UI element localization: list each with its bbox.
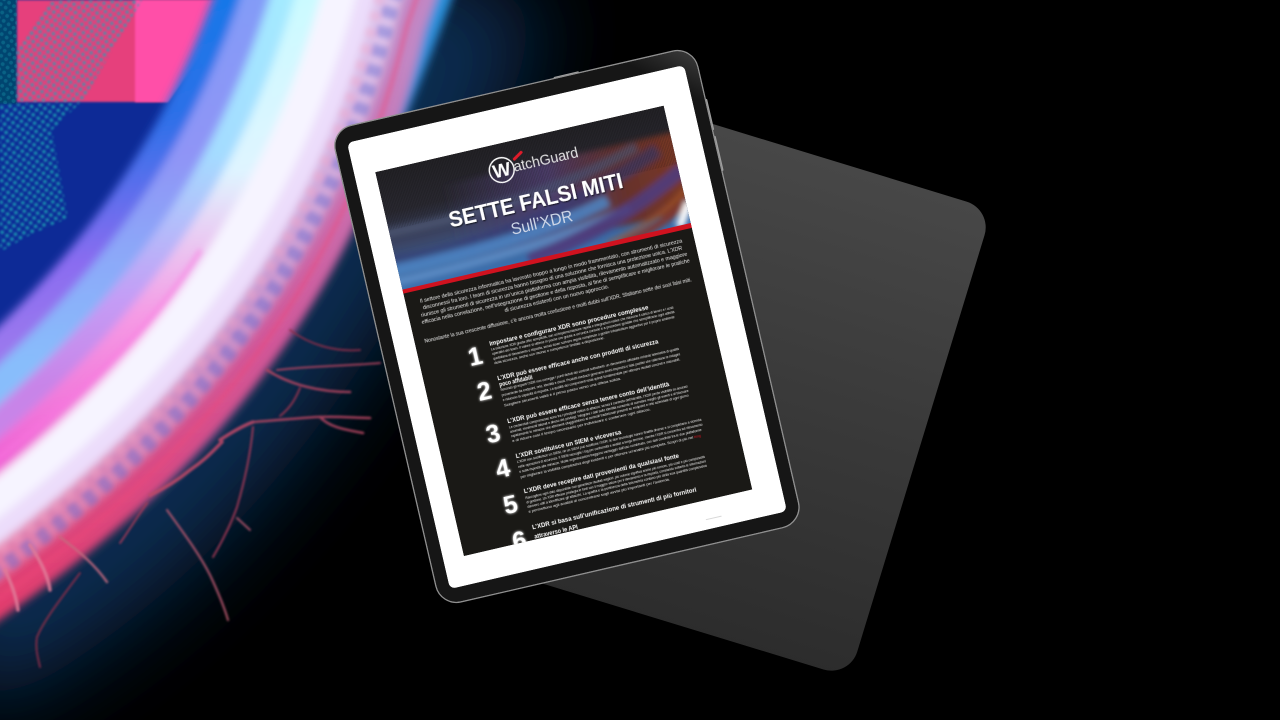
myth 4: e sulla risposta alle minacce. Molte organizzazioni traggono vantaggio dall’uso combinato, con dati condivisi tra le due piattaforme: [519, 428, 702, 474]
myth 4: L’XDR sostituisce un SIEM e viceversa: [515, 429, 622, 460]
tablet screen: [347, 65, 787, 589]
banner artwork: [370, 105, 696, 295]
banner streaks: [377, 132, 696, 295]
number 6: 6: [510, 526, 529, 556]
myth 2: poco affidabili: [499, 374, 533, 389]
myth 5: Raccogliere ogni dato disponibile non garantisce risultati migliori: più volume significa anche più rumore, più costi e più complessità: [525, 455, 706, 500]
myth 3: Le credenziali compromesse sono tra i principali vettori di attacco: senza il contesto dell’identità, l’XDR perde visibilità su accessi: [509, 384, 688, 430]
myth 3: anomali, movimenti laterali e abuso dei privilegi. Integrare i dati sulle identità consente di correlare meglio gli eventi e di bloccare: [510, 389, 689, 434]
number 5: 5: [501, 490, 521, 520]
logo letter: W: [491, 159, 513, 182]
myth 3: e di ridurre così il tempo necessario per individuare e contenere ogni attacco.: [512, 407, 651, 443]
myth 3: [507, 377, 691, 443]
page background: [375, 106, 752, 556]
navy panel: [0, 0, 260, 360]
dark navy glow: [0, 0, 470, 640]
document page: [370, 105, 759, 569]
red band: [402, 223, 692, 294]
title: SETTE FALSI MITI: [446, 168, 625, 232]
myth 6: L’XDR si basa sull’unificazione di strumenti di più fornitori: [531, 486, 697, 531]
red link: blog: [694, 434, 701, 439]
number 2: 2: [475, 377, 494, 407]
textured streak overlays: [0, 0, 462, 696]
teal mesh on corner: [0, 0, 17, 104]
tablet buttons: [555, 46, 722, 202]
teal mesh on pink: [17, 0, 142, 102]
myth 4: L’XDR non sostituisce un SIEM, né un SIEM può sostituire l’XDR: le due tecnologie hanno finalità diverse e si completano a vicenda: [517, 417, 703, 464]
intro text: [415, 238, 695, 345]
dark teal corner: [0, 0, 17, 104]
myth 6: attraverso le API: [534, 524, 579, 540]
intro text: disconnessi fra loro. I team di sicurezza hanno bisogno di una soluzione che fornisca una protezione unica. L’XDR: [422, 245, 683, 311]
hot pink segment: [135, 0, 240, 102]
myth 3: rapidamente le minacce che altrimenti sfuggirebbero ai controlli tradizionali presenti su endpoint e rete aziendale di ogni giorno: [511, 394, 689, 439]
myth 1: La soluzione XDR giusta offre semplicità, con un’implementazione rapida e integrazioni native che riducono il carico di lavoro e i costi: [491, 305, 674, 351]
screen glare: [706, 516, 721, 520]
bezel gloss: top right corner highlight: [331, 47, 802, 606]
myth 2: Secondo gli esperti l’XDR non corregge i punti deboli dei controlli sottostanti: un rilevamento affidabile richiede telemetria di qualità: [500, 347, 680, 392]
logo circle: [488, 156, 515, 184]
intro text: Il settore della sicurezza informatica ha lavorato troppo a lungo in modo frammentato, con strumenti di sicurezza: [419, 238, 683, 305]
myth 1: operativi del team. Il valore si ottiene in poche ore grazie a un’unica console e a procedure guidate che semplificano ogni attività: [492, 310, 676, 356]
banner base: [375, 106, 691, 290]
myth 2: e riducono la capacità di risposta. La qualità dei componenti resta quindi fondamentale per ottenere risultati concreti e misurabili.: [502, 358, 681, 402]
illustration: tablet mockup over light-streak background: [0, 0, 986, 720]
intro text: Nonostante la sua crescente diffusione, c’è ancora molta confusione e molti dubbi sull’XDR. Sfatiamo sette dei suoi falsi miti.: [424, 277, 692, 345]
number 4: 4: [493, 454, 513, 484]
myth 1: quotidiana di rilevamento e risposta, senza dover scrivere regole complesse o gestire infrastrutture aggiuntive per il proprio ambiente: [493, 315, 675, 361]
myth 1: Impostare e configurare XDR sono procedure complesse: [489, 304, 650, 348]
logo wordmark: atchGuard: [512, 145, 580, 176]
myth 1: della sicurezza, anche con risorse e competenze limitate a disposizione.: [494, 336, 605, 365]
banner hatch: [375, 106, 677, 231]
light bands: [0, 0, 500, 696]
number 3: 3: [483, 419, 503, 450]
myth 2: L’XDR può essere efficace anche con prodotti di sicurezza: [497, 338, 659, 382]
logo slash: [513, 152, 522, 159]
myth 3: L’XDR può essere efficace senza tenere conto dell’identità: [507, 381, 670, 425]
myth 4: per migliorare la visibilità complessiva degli incidenti e per ottenere un’analisi più completa. Scopri di più nel: [520, 435, 694, 479]
myth 5: L’XDR deve recepire dati provenienti da qualsiasi fonte: [523, 452, 680, 495]
myth 2: proveniente da endpoint, rete, identità e cloud. Prodotti mediocri generano avvisi imprecisi e falsi positivi che rallentano le indagini: [501, 352, 681, 397]
pink square: [17, 0, 240, 102]
number 1: 1: [465, 342, 485, 372]
myth 5: di gestione. Un XDR efficace privilegia le fonti con il maggior valore per il rilevamento e la risposta, correlando soltanto le informazioni: [526, 459, 706, 505]
background: light streak artwork: [0, 0, 500, 696]
subtitle: Sull’XDR: [509, 207, 575, 239]
intro text: efficacia nella correlazione, nell’integrazione di gestione e della risposta, al fine di semplificare e migliorare le pratiche: [421, 258, 691, 326]
myth 5: davvero utili a identificare gli attacchi. La qualità e la pertinenza della telemetria contano più della sua quantità complessiva: [527, 464, 708, 509]
intro text: riunisce gli strumenti di sicurezza in un’unica piattaforma con ampia visibilità, rilevamento automatizzato e maggiore: [421, 252, 688, 319]
tablet body: [331, 46, 803, 607]
myth 5: e permettono agli analisti di concentrarsi sugli avvisi più importanti per l’azienda.: [528, 477, 670, 514]
back panel: dark grey tablet rear: [494, 101, 992, 677]
intro text: di sicurezza esistenti con un nuovo approccio.: [504, 284, 610, 314]
tablet: [331, 46, 804, 607]
myth 4: nelle operazioni di sicurezza. Il SIEM raccoglie i log per conformità e analisi a lungo termine, mentre l’XDR si concentra sul rilevamento: [518, 422, 703, 469]
myth 2: [497, 340, 680, 406]
red tendrils: [5, 330, 380, 667]
logo: [488, 146, 578, 184]
myth 2: Scegliere strumenti validi è il primo passo verso una difesa solida.: [504, 377, 621, 408]
teal mesh on navy: [0, 103, 80, 252]
